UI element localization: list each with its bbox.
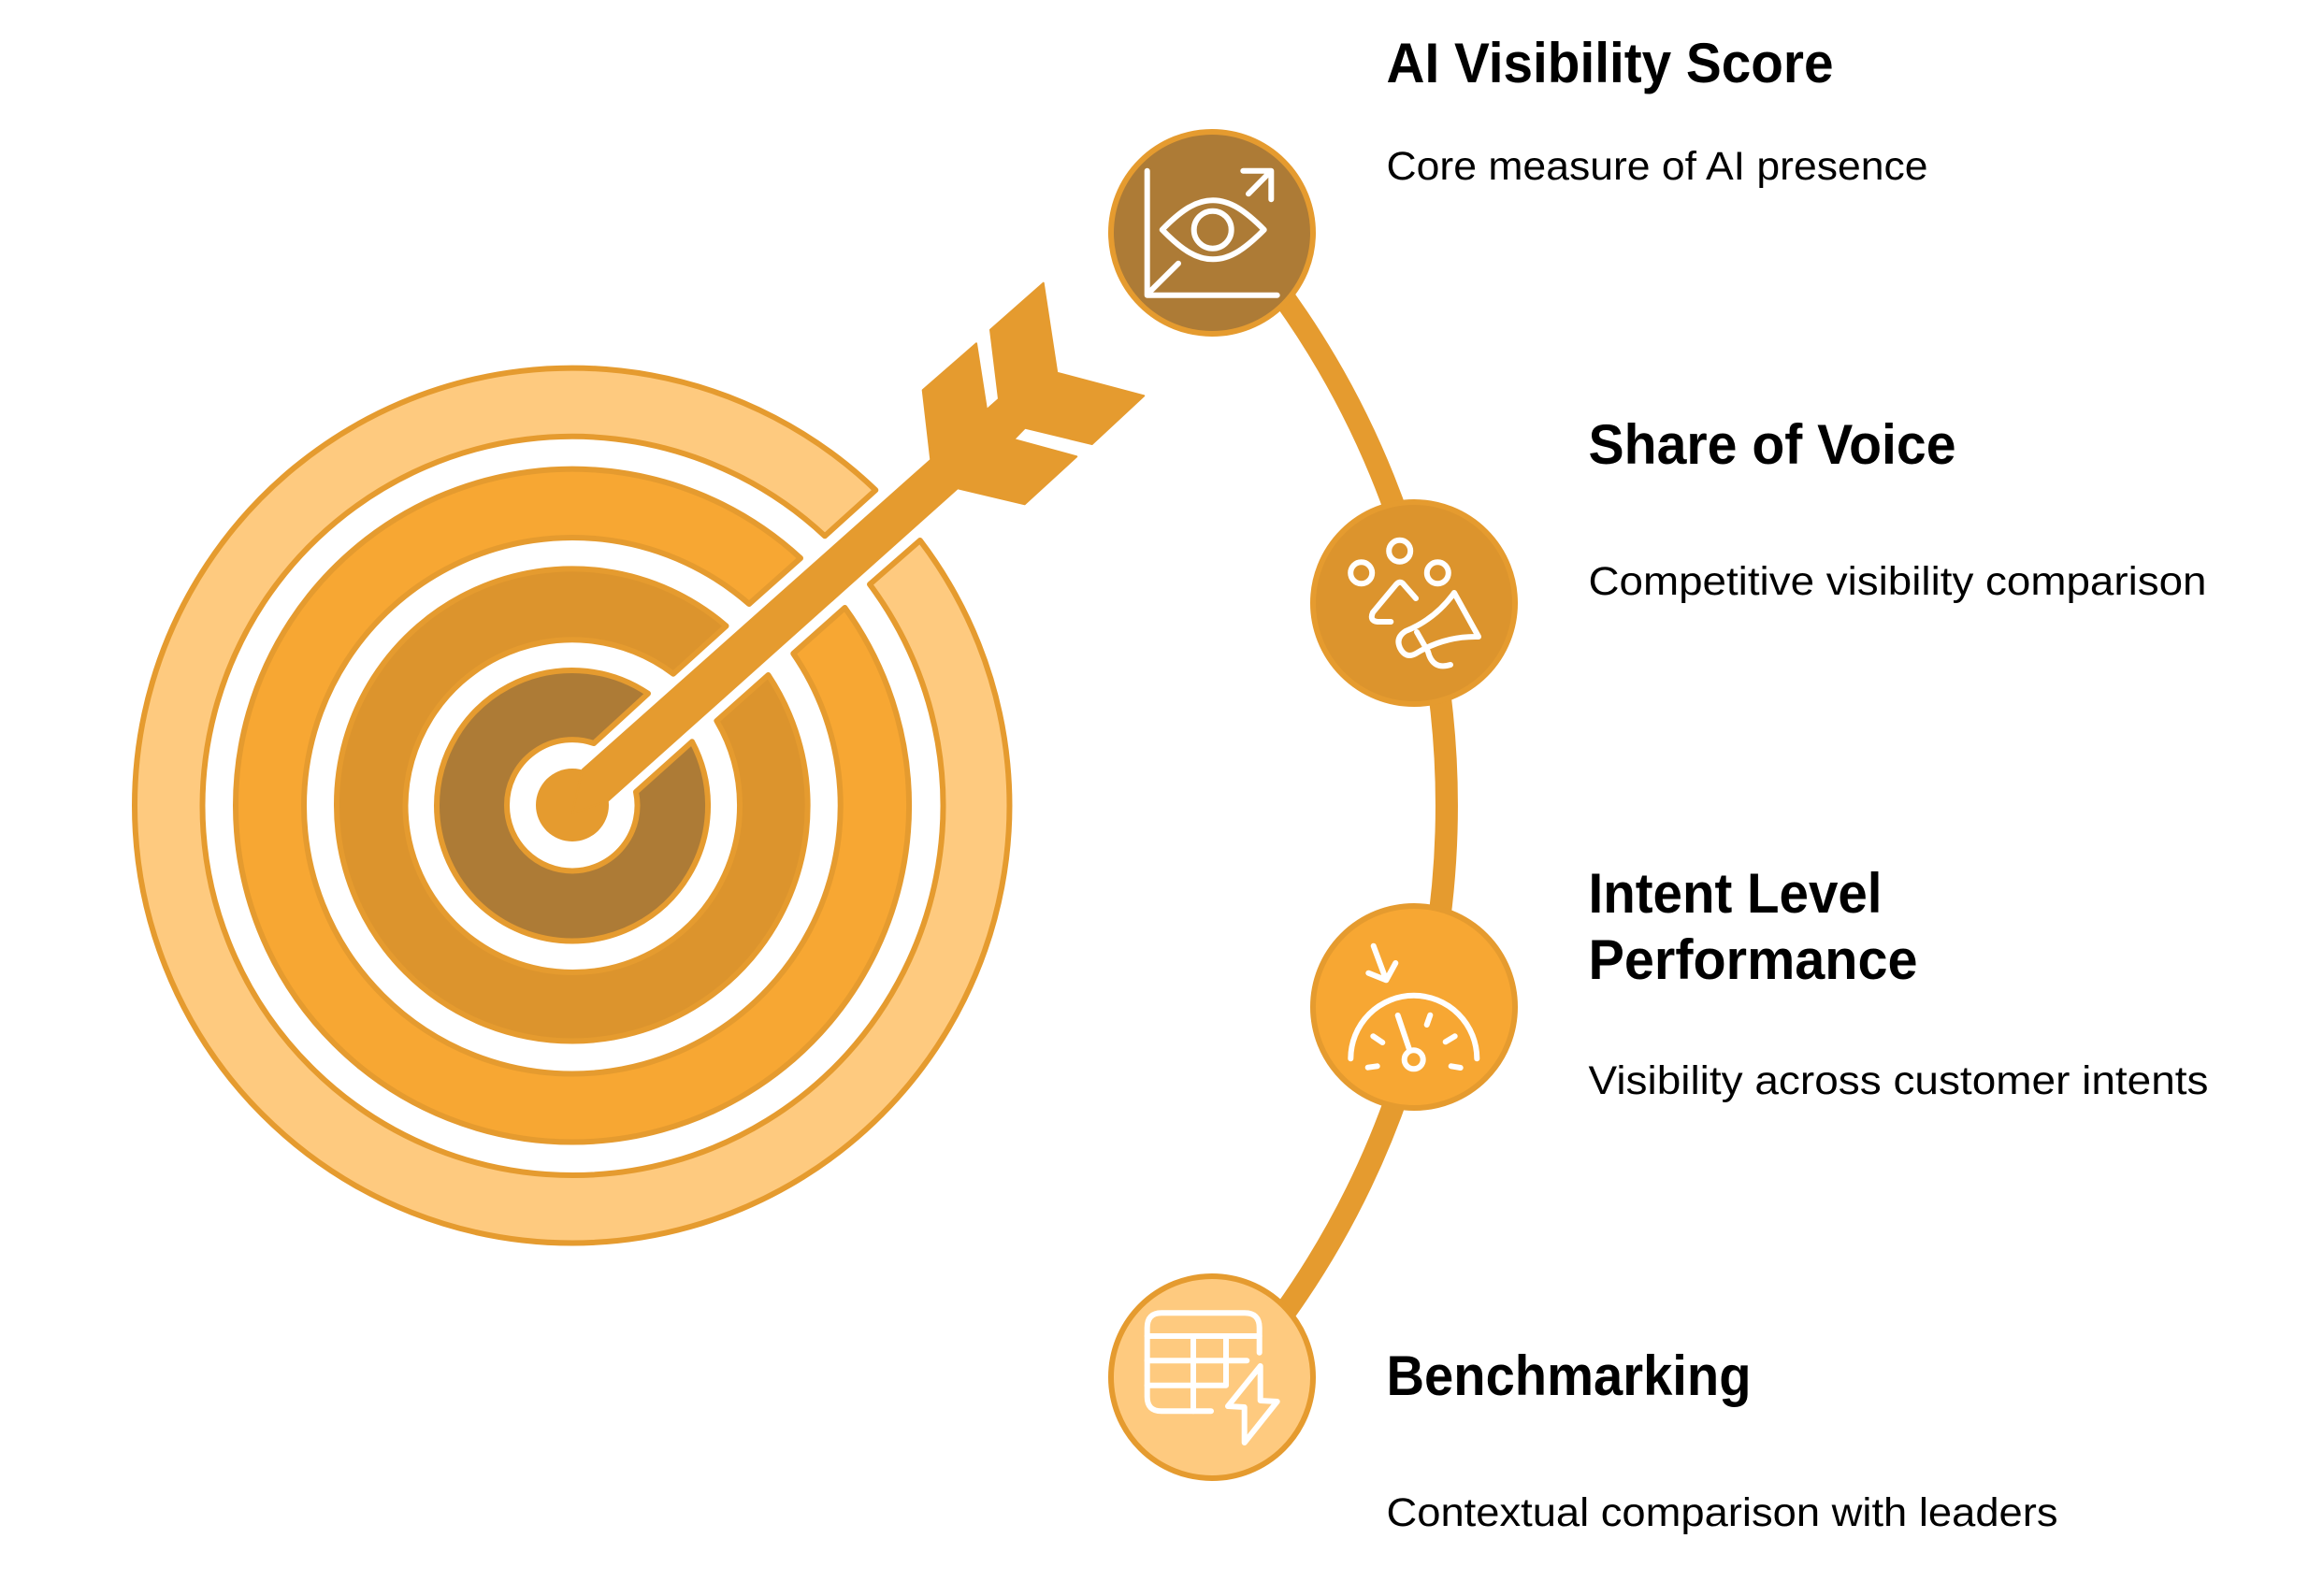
icon: eye with chart: [1147, 171, 1277, 295]
curved connector arc: [1273, 282, 1447, 1330]
target ring 3: [337, 568, 808, 1042]
heading: Intent Level Performance: Performance: [1588, 928, 1917, 991]
heading: Share of Voice: Share of Voice: [1588, 413, 1956, 476]
description: Intent Level Performance: Visibility across customer intents: [1588, 1058, 2209, 1103]
target ring 1 (outer): [135, 368, 1009, 1244]
icon: table with lightning bolt: [1147, 1313, 1277, 1443]
bullseye and arrow: [536, 283, 1144, 841]
node: Share of Voice: [1313, 502, 1515, 704]
heading: Intent Level Performance: Intent Level: [1588, 862, 1882, 925]
node: Intent Level Performance: [1313, 906, 1515, 1108]
node circle: [1111, 1276, 1313, 1478]
node circle: [1111, 132, 1313, 334]
icon: megaphone with people: [1350, 540, 1479, 666]
heading: AI Visibility Score: AI Visibility Score: [1386, 32, 1833, 94]
node: AI Visibility Score: [1111, 132, 1313, 334]
heading: Benchmarking: Benchmarking: [1386, 1344, 1751, 1407]
target ring 2: [236, 469, 909, 1143]
target graphic with arrow: [135, 283, 1144, 1244]
icon: gauge: [1350, 946, 1477, 1069]
description: AI Visibility Score: Core measure of AI presence: [1386, 144, 1928, 189]
node: Benchmarking: [1111, 1276, 1313, 1478]
heading: Intent Level Performance: [1588, 862, 1917, 991]
node circle: [1313, 906, 1515, 1108]
description: Share of Voice: Competitive visibility comparison: [1588, 559, 2207, 604]
node circle: [1313, 502, 1515, 704]
description: Benchmarking: Contextual comparison with leaders: [1386, 1490, 2057, 1535]
target ring 4 (inner): [437, 670, 708, 941]
